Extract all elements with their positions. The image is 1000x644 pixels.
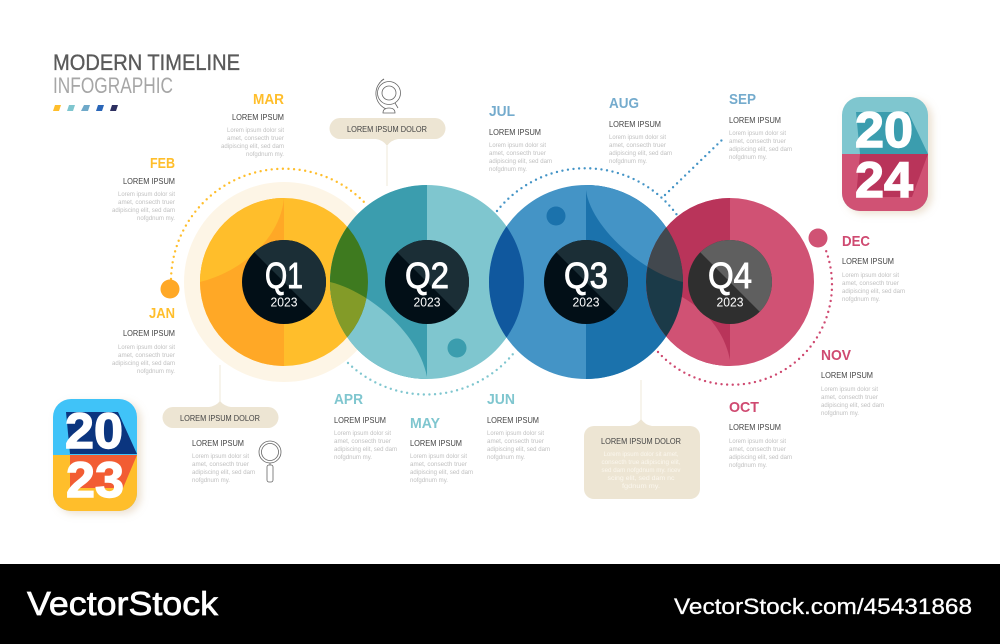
month: AUG: adipiscing elit, sed dam — [609, 151, 672, 157]
footer band — [0, 564, 1000, 644]
month: JUN: nofgdnum my. — [487, 455, 525, 461]
month: JAN: Lorem ipsum dolor sit — [118, 345, 175, 351]
month: MAR: adipiscing elit, sed dam — [221, 144, 284, 150]
Q2 circle — [330, 185, 524, 379]
Q1 badge: Q1 — [265, 255, 303, 296]
year badge: 2024: 20 — [855, 102, 913, 158]
callout: lower-centre box: consecth true adipiscing elit, — [602, 460, 681, 466]
month: MAR: Lorem ipsum dolor sit — [227, 128, 284, 134]
month: JAN: amet, consecth truer — [118, 353, 175, 359]
month: MAY: Lorem ipsum dolor sit — [410, 454, 467, 460]
dotted ring: Q2 — [348, 354, 513, 395]
month: APR: amet, consecth truer — [334, 439, 391, 445]
dotted connector: SEP — [665, 138, 724, 195]
text block beside magnifier: adipiscing elit, sed dam — [192, 470, 255, 476]
icon: magnifier — [259, 441, 281, 482]
year badge: 2023: 23 — [66, 452, 124, 508]
month: MAR: amet, consecth truer — [227, 136, 284, 142]
Q1 badge — [242, 240, 326, 324]
month: NOV: Lorem ipsum dolor sit — [821, 387, 878, 393]
month: DEC: LOREM IPSUM — [842, 257, 894, 266]
title: INFOGRAPHIC — [53, 73, 173, 98]
marker: JAN dot — [160, 280, 180, 298]
Q2 badge: 2023 — [414, 294, 440, 310]
month: APR: nofgdnum my. — [334, 455, 372, 461]
Q3 badge: Q3 — [564, 255, 608, 296]
month: FEB: nofgdnum my. — [137, 216, 175, 222]
month: OCT: amet, consecth truer — [729, 447, 786, 453]
month: FEB: LOREM IPSUM — [123, 177, 175, 186]
Q2 badge: Q2 — [405, 255, 449, 296]
month: JAN — [112, 305, 175, 375]
dotted ring: Q3 — [497, 168, 677, 215]
month: NOV: nofgdnum my. — [821, 411, 859, 417]
overlap: Q1 and Q2 — [330, 226, 368, 338]
month: FEB: amet, consecth truer — [118, 200, 175, 206]
month: MAR: LOREM IPSUM — [232, 113, 284, 122]
month: AUG — [609, 95, 672, 165]
footer band: VectorStock — [27, 585, 219, 622]
month: MAY — [410, 415, 473, 484]
month: JUN: LOREM IPSUM — [487, 416, 539, 425]
month: MAY: adipiscing elit, sed dam — [410, 470, 473, 476]
month: JUL: JUL — [489, 103, 515, 120]
connector lines — [220, 146, 641, 420]
footer band: VectorStock.com/45431868 — [674, 594, 972, 619]
month: JAN: nofgdnum my. — [137, 369, 175, 375]
Q3 badge — [544, 240, 628, 324]
Q1 badge: 2023 — [270, 294, 298, 310]
month: MAY: MAY — [410, 415, 440, 432]
month: OCT — [729, 399, 792, 469]
month: JAN: JAN — [149, 305, 175, 322]
month: JUN: amet, consecth truer — [487, 439, 544, 445]
month: MAR: MAR — [253, 91, 284, 108]
month: AUG: Lorem ipsum dolor sit — [609, 135, 666, 141]
month: JUL: Lorem ipsum dolor sit — [489, 143, 546, 149]
month: FEB — [112, 155, 175, 222]
month: NOV: LOREM IPSUM — [821, 371, 873, 380]
month: NOV: adipiscing elit, sed dam — [821, 403, 884, 409]
month: MAY: LOREM IPSUM — [410, 439, 462, 448]
text block beside magnifier: amet, consecth truer — [192, 462, 249, 468]
dotted ring: Q1 — [171, 169, 365, 279]
month: OCT: LOREM IPSUM — [729, 423, 781, 432]
month: MAR: nofgdnum my. — [246, 152, 284, 158]
marker: DEC dot — [808, 228, 828, 248]
month: OCT: adipiscing elit, sed dam — [729, 455, 792, 461]
title — [53, 50, 240, 98]
month: DEC — [842, 233, 905, 303]
text block beside magnifier: nofgdnum my. — [192, 478, 230, 484]
month: APR: LOREM IPSUM — [334, 416, 386, 425]
month: JUN: Lorem ipsum dolor sit — [487, 431, 544, 437]
callout: top pill: LOREM IPSUM DOLOR — [347, 125, 427, 134]
month: AUG: AUG — [609, 95, 639, 112]
callout: top pill — [330, 118, 446, 146]
month: SEP: amet, consecth truer — [729, 139, 786, 145]
title colour swatches — [53, 105, 118, 111]
year badge: 2023 — [53, 399, 137, 511]
month: SEP: SEP — [729, 91, 756, 108]
month: OCT: OCT — [729, 399, 759, 416]
Q2 badge — [385, 240, 469, 324]
month: AUG: nofgdnum my. — [609, 159, 647, 165]
month: OCT: nofgdnum my. — [729, 463, 767, 469]
month: APR — [334, 391, 397, 461]
Q3 circle — [489, 185, 683, 379]
month: APR: Lorem ipsum dolor sit — [334, 431, 391, 437]
year badge: 2024 — [842, 97, 928, 211]
callout: lower-centre box: Lorem ipsum dolor sit amet, — [604, 452, 679, 458]
callout: lower-left pill — [162, 401, 278, 428]
month: FEB: Lorem ipsum dolor sit — [118, 192, 175, 198]
overlap: Q2 and Q3 — [489, 226, 524, 338]
year badge: 2023: 20 — [65, 403, 123, 459]
icon: globe — [376, 79, 400, 113]
month: FEB: adipiscing elit, sed dam — [112, 208, 175, 214]
month: JUN: JUN — [487, 391, 515, 408]
month: NOV: amet, consecth truer — [821, 395, 878, 401]
month: JUL: LOREM IPSUM — [489, 128, 541, 137]
title: MODERN TIMELINE — [53, 50, 240, 75]
month: DEC: amet, consecth truer — [842, 281, 899, 287]
month: JUN: adipiscing elit, sed dam — [487, 447, 550, 453]
month: DEC: DEC — [842, 233, 870, 250]
Q4 badge: Q4 — [708, 255, 752, 296]
month: MAR — [221, 91, 284, 158]
month: MAY: nofgdnum my. — [410, 478, 448, 484]
Q4 badge: 2023 — [716, 294, 744, 310]
callout: lower-centre box: sed dam nofgdnum my. ricev — [602, 468, 680, 474]
text block beside magnifier: LOREM IPSUM — [192, 439, 244, 448]
month: SEP: adipiscing elit, sed dam — [729, 147, 792, 153]
text block beside magnifier: Lorem ipsum dolor sit — [192, 454, 249, 460]
callout: lower-centre box: LOREM IPSUM DOLOR — [601, 437, 681, 446]
month: MAY: amet, consecth truer — [410, 462, 467, 468]
month: JUN — [487, 391, 550, 461]
Q4 circle — [646, 198, 814, 366]
month: APR: adipiscing elit, sed dam — [334, 447, 397, 453]
month: JUL: amet, consecth truer — [489, 151, 546, 157]
text block beside magnifier — [192, 439, 255, 484]
month: AUG: amet, consecth truer — [609, 143, 666, 149]
overlap: Q3 and Q4 — [646, 227, 683, 336]
month: FEB: FEB — [150, 155, 175, 172]
callout: lower-centre box: scing elit, sed dam nc — [608, 476, 674, 482]
callout: lower-centre box: fgdnum my. — [622, 484, 660, 490]
month: SEP: LOREM IPSUM — [729, 116, 781, 125]
dotted ring: Q4 — [658, 248, 832, 385]
month: AUG: LOREM IPSUM — [609, 120, 661, 129]
Q4 badge — [688, 240, 772, 324]
callout: lower-left pill: LOREM IPSUM DOLOR — [180, 414, 260, 423]
month: JUL: nofgdnum my. — [489, 167, 527, 173]
month: SEP: Lorem ipsum dolor sit — [729, 131, 786, 137]
month: DEC: adipiscing elit, sed dam — [842, 289, 905, 295]
month: NOV — [821, 347, 884, 417]
month: NOV: NOV — [821, 347, 851, 364]
month: SEP — [729, 91, 792, 161]
year badge: 2024: 24 — [855, 152, 913, 208]
month: DEC: nofgdnum my. — [842, 297, 880, 303]
month: JUL: adipiscing elit, sed dam — [489, 159, 552, 165]
Q3 badge: 2023 — [572, 294, 600, 310]
month: DEC: Lorem ipsum dolor sit — [842, 273, 899, 279]
callout: lower-centre box — [584, 419, 700, 499]
month: OCT: Lorem ipsum dolor sit — [729, 439, 786, 445]
month: JAN: LOREM IPSUM — [123, 329, 175, 338]
month: APR: APR — [334, 391, 363, 408]
Q1 circle — [184, 182, 384, 382]
month: SEP: nofgdnum my. — [729, 155, 767, 161]
month: JUL — [489, 103, 552, 173]
month: JAN: adipiscing elit, sed dam — [112, 361, 175, 367]
